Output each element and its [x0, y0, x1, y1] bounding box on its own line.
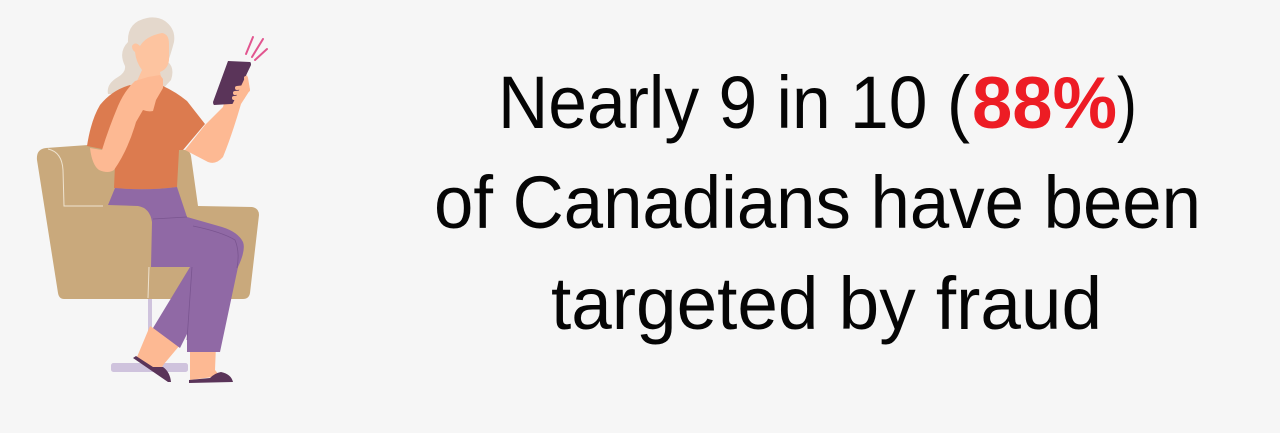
headline line 3: targeted by fraud: [551, 262, 1102, 345]
icon: trousers: [108, 187, 244, 352]
highlighted statistic: 88%: [972, 63, 1117, 144]
icon: face and neck: [132, 33, 169, 92]
headline line 1: Nearly 9 in 10 (: [498, 61, 970, 144]
icon: raised arm: [90, 75, 163, 172]
icon: right leg skin and shoe: [189, 345, 233, 383]
headline text: [434, 61, 1201, 345]
icon: chair stand: [111, 295, 188, 372]
icon: shirt: [87, 85, 205, 189]
icon: notification lines: [246, 37, 267, 60]
icon: fingers over phone: [234, 78, 248, 98]
icon: left leg skin and shoe: [133, 326, 180, 382]
icon: phone: [213, 61, 251, 105]
icon: hair: [108, 17, 174, 94]
icon: forearm holding phone: [185, 75, 250, 163]
headline line 2: of Canadians have been: [434, 161, 1201, 244]
headline line 1: ): [1117, 64, 1137, 144]
illustration: woman in armchair looking at phone: [37, 17, 267, 383]
icon: armchair: [37, 145, 259, 299]
decorative trouser fold lines: [153, 217, 238, 340]
